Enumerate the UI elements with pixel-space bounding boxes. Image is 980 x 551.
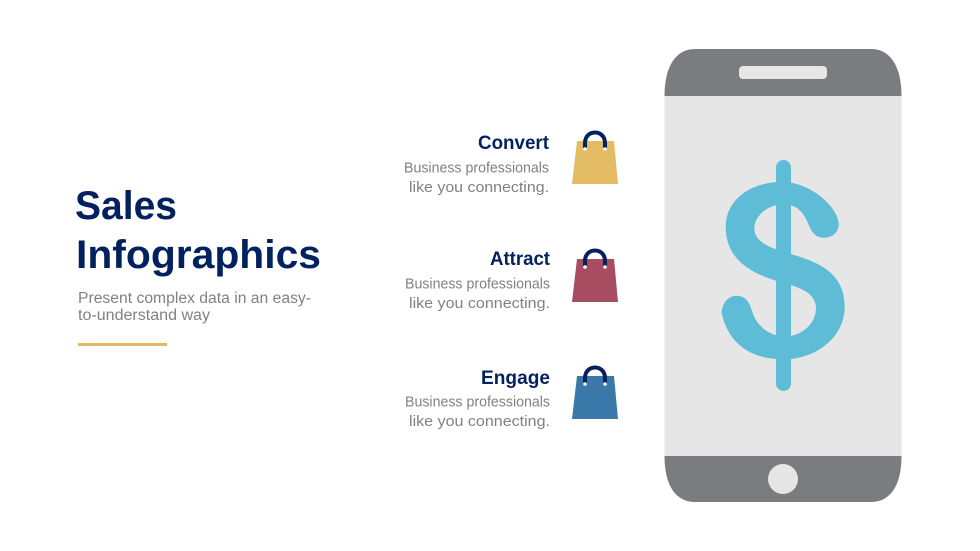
text: Attract description: like you connecting. [409,295,550,312]
icon: red shopping bag [572,250,618,302]
text: Convert description: like you connecting. [409,179,549,196]
text: Engage description: like you connecting. [409,413,550,430]
subtitle text [78,290,311,324]
phone speaker [739,66,827,79]
icon: yellow shopping bag [572,132,618,184]
phone illustration [664,49,902,502]
item: Attract [405,249,618,312]
phone home button [768,464,798,494]
accent underline [78,343,167,346]
text: Convert description: Business professionals [404,160,549,176]
phone screen [664,96,902,456]
phone bottom bezel [664,456,902,502]
text: Attract description [405,276,550,312]
title [75,184,321,277]
text: Attract description: Business professionals [405,276,550,292]
icon: blue shopping bag [572,368,618,419]
heading: Attract: Attract [490,249,551,270]
heading: Engage: Engage [481,368,550,389]
phone top bezel [664,49,902,96]
subtitle text: to-understand way [78,307,210,324]
text: Engage description: Business professionals [405,394,550,410]
item: Engage [405,368,618,430]
title: Sales [75,184,177,228]
item: Convert [404,132,618,196]
text: Engage description [405,394,550,430]
heading: Convert: Convert [478,133,550,154]
title: Infographics [76,233,321,277]
text: Convert description [404,160,549,196]
subtitle text: Present complex data in an easy- [78,290,311,307]
icon: dollar sign [722,160,845,391]
